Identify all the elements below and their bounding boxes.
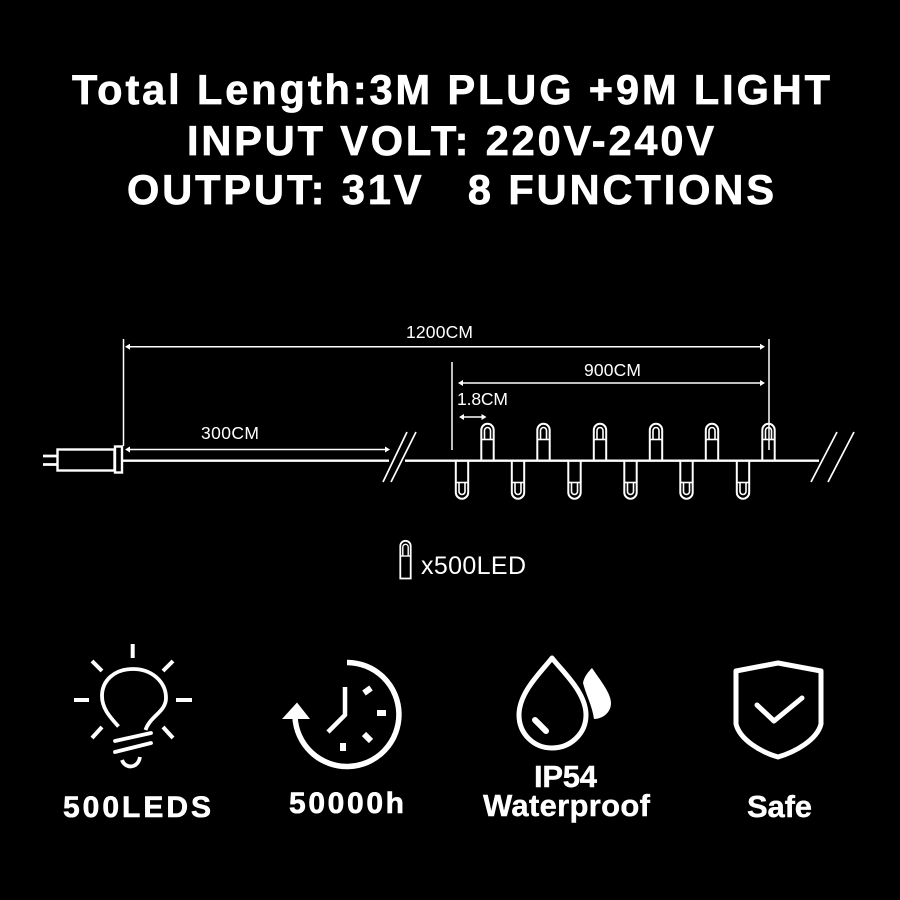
title: Total Length:3M PLUG +9M LIGHT	[72, 66, 830, 113]
feature: 500LEDS: 500LEDS	[63, 791, 211, 824]
dimension: 900CM	[452, 360, 765, 450]
title: INPUT VOLT: 220V-240V	[187, 117, 714, 164]
LED count legend	[400, 541, 526, 580]
feature: Safe: Safe	[747, 789, 812, 824]
dimension: 1200CM	[124, 322, 769, 450]
title: OUTPUT: 31V 8 FUNCTIONS	[127, 166, 774, 213]
wiring diagram	[43, 322, 854, 499]
LEDs below wire	[456, 460, 749, 499]
feature: 500LEDS	[63, 644, 211, 824]
dimension: 900CM: 900CM	[584, 360, 641, 380]
light wire	[405, 460, 819, 462]
power cable	[122, 460, 389, 462]
feature: IP54 Waterproof	[483, 658, 651, 823]
dimension: 1.8CM: 1.8CM	[457, 389, 508, 409]
icon: plug	[43, 446, 122, 472]
feature: IP54 Waterproof: IP54	[534, 759, 598, 794]
wire end break mark	[811, 432, 854, 482]
icon: shield with check	[736, 663, 821, 757]
dimension: 1.8CM	[457, 389, 508, 420]
feature: IP54 Waterproof: Waterproof	[483, 788, 651, 823]
feature: 50000h	[282, 662, 404, 820]
icon: clock with arrow	[282, 662, 399, 766]
LED count legend: x500LED	[421, 552, 526, 580]
icon: light bulb	[74, 644, 192, 766]
cable break mark	[383, 432, 416, 482]
LEDs above wire	[481, 424, 775, 460]
feature: 50000h: 50000h	[289, 787, 404, 820]
dimension: 300CM	[125, 423, 390, 452]
icon: water drops	[519, 658, 611, 748]
feature: Safe	[736, 663, 821, 824]
icon: LED	[400, 541, 411, 578]
title	[72, 66, 830, 213]
dimension: 300CM: 300CM	[201, 423, 259, 443]
dimension: 1200CM: 1200CM	[406, 322, 473, 342]
